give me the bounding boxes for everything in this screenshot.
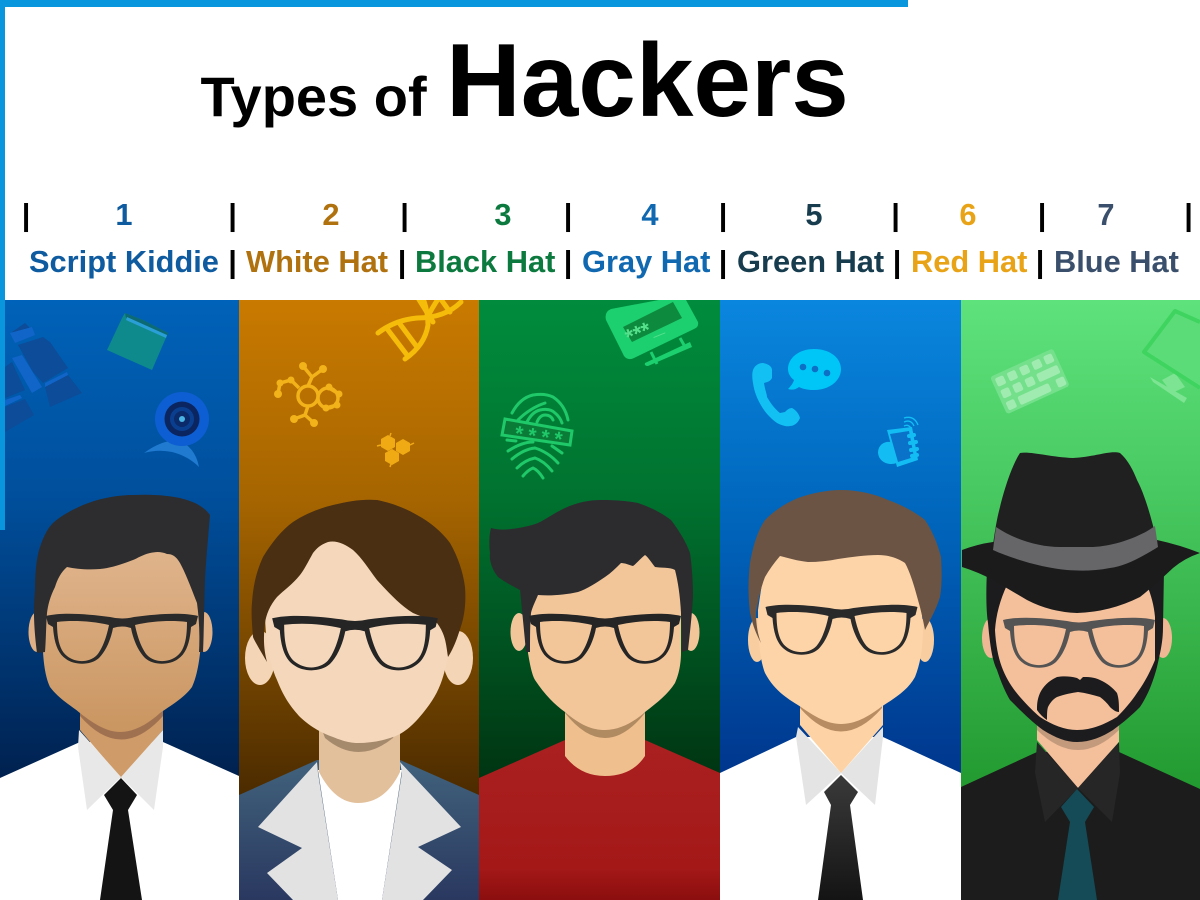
hair [748,490,942,643]
icon: molecule [274,362,342,427]
hat band [993,526,1158,571]
neck [565,705,645,776]
glasses [272,616,438,670]
icon: DNA helix [378,296,461,359]
neck shadow [1037,715,1119,750]
ears [982,618,1000,658]
label separators: | [1036,244,1044,279]
tie [100,778,142,900]
label: Green Hat: Green Hat [737,244,884,279]
glasses [46,614,198,664]
number 5: 5 [805,197,823,232]
panel: White Hat [239,296,479,900]
label row with separators [29,244,1179,279]
collar [796,727,883,805]
label separators: | [228,244,237,279]
number 3: 3 [494,197,512,232]
neck shadow [800,700,882,732]
face [265,535,448,743]
neck [319,725,400,803]
panel 1 background [0,300,239,900]
icon: telephone handset [752,363,800,426]
tie [1058,789,1097,900]
lapels [258,762,461,900]
label: Red Hat: Red Hat [911,244,1027,279]
number 1: 1 [115,197,133,232]
label: Blue Hat: Blue Hat [1054,244,1179,279]
mustache and goatee [1037,676,1119,720]
ears [748,618,766,662]
tie [818,775,863,900]
icon: computer with password: ***_ [622,312,667,350]
title [200,22,849,138]
icon: fingerprint with password bar: **** [513,422,569,452]
panel: Gray Hat [720,300,961,900]
jacket [239,760,479,900]
panel: Black Hat [479,296,720,900]
label: Gray Hat: Gray Hat [582,244,710,279]
black shirt [961,752,1200,900]
label: Script Kiddie: Script Kiddie [29,244,219,279]
label separators: | [564,244,572,279]
number 6: 6 [959,197,977,232]
face [43,530,202,732]
number separators: | [891,197,900,232]
neck shadow [322,730,396,752]
neck shadow [565,705,645,738]
number row with separators [22,197,1193,232]
accent: left blue bar [0,0,5,530]
icon: honeycomb cells [377,433,414,467]
label separators [228,244,1044,279]
hat crown [993,452,1157,567]
icon: computer monitor [1144,311,1200,403]
collar [78,730,163,810]
ears [245,631,275,685]
number separators [22,197,1193,232]
glasses [766,605,918,655]
panel 3 background [479,300,720,900]
icon: fingerprint with password bar [502,394,572,478]
neck [80,705,163,778]
label separators: | [719,244,727,279]
face [995,585,1155,730]
dark collar [1035,742,1120,822]
person: Gray Hat figure [720,490,961,900]
label: Black Hat: Black Hat [415,244,555,279]
hat brim [962,540,1200,613]
panel: Green Hat [961,300,1200,900]
hair [34,495,210,653]
number separators: | [719,197,727,232]
panel: Script Kiddie [0,300,239,900]
icon: smartphone in hand [878,417,918,467]
face [758,530,923,724]
beard and side hair [986,570,1164,742]
red shirt [479,740,720,900]
hair [252,500,465,662]
icon: computer with password [606,296,698,366]
panel 4 background [720,300,961,900]
icon: folder [107,313,168,370]
face [528,544,681,730]
number separators: | [1184,197,1193,232]
person: Black Hat figure [479,500,720,900]
neck [1037,715,1119,788]
panel 5 background [961,300,1200,900]
neck shadow [80,705,163,740]
person: Green Hat figure [961,452,1200,900]
panel: white background [0,0,1200,300]
white shirt [318,770,402,900]
glasses [529,614,681,664]
number 7: 7 [1097,197,1115,232]
icon: webcam [144,392,209,467]
number separators: | [400,197,409,232]
panel 2 background [239,300,479,900]
label separators: | [893,244,901,279]
number separators: | [564,197,572,232]
number separators: | [1038,197,1046,232]
glasses [1003,618,1155,668]
label: White Hat: White Hat [246,244,388,279]
label separators: | [398,244,406,279]
icon: keyboard [990,348,1070,414]
accent: top blue bar [0,0,908,7]
white shirt [720,737,961,900]
ears [510,613,528,651]
person: Script Kiddie figure [0,495,239,900]
neck [800,700,883,773]
icon: binoculars [5,323,82,432]
number separators: | [22,197,30,232]
white shirt [0,742,239,900]
number 4: 4 [641,197,659,232]
ears [28,612,46,652]
number separators: | [228,197,237,232]
title: Types of [200,65,427,128]
hair [489,500,693,652]
number 2: 2 [322,197,340,232]
title: Hackers [446,22,849,138]
person: White Hat figure [239,500,479,900]
icon: chat bubble [788,349,841,390]
